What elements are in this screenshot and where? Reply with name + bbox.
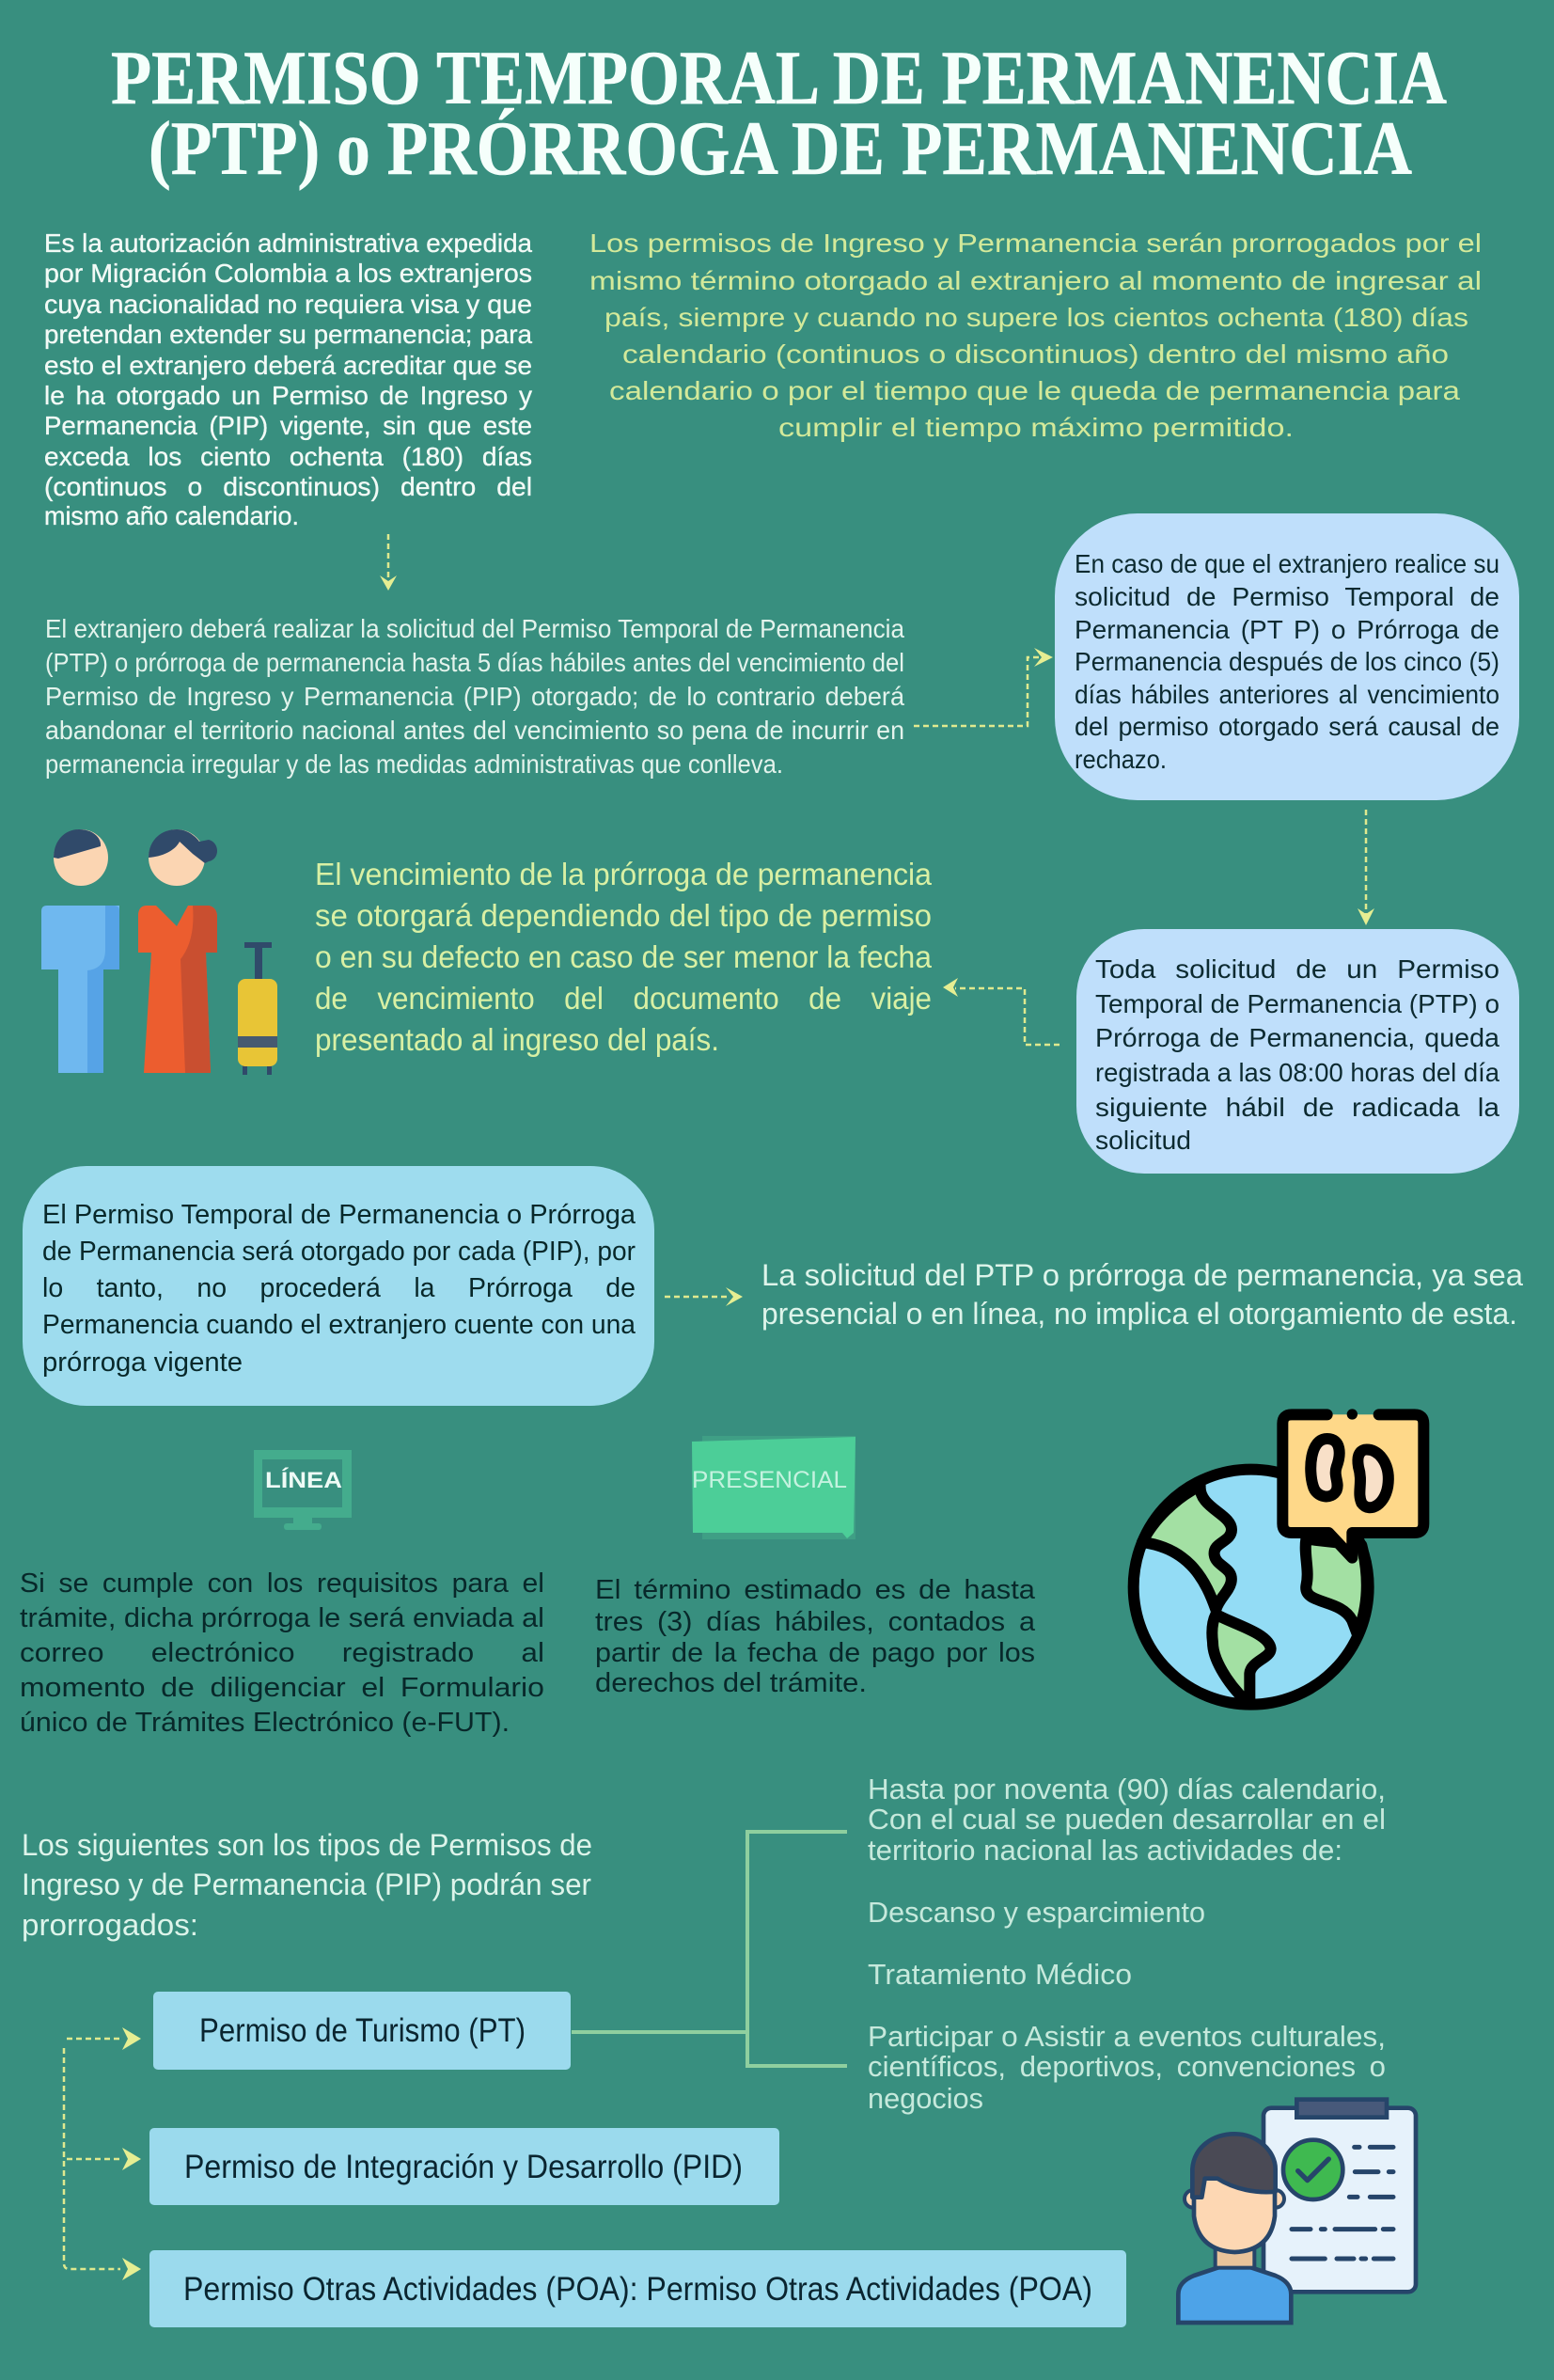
text block: tourism activities: Descanso y esparcimiento — [868, 1896, 1205, 1929]
text block: yellow intro: Los permisos de Ingreso y Permanencia serán prorrogados por el — [589, 229, 1482, 258]
arrow: to expiry text — [943, 978, 1060, 1045]
arrow: down from definition — [380, 534, 397, 591]
text block: expiry: se otorgará dependiendo del tipo de permiso — [315, 898, 932, 933]
panel: rejection bubble: En caso de que el extranjero realice su — [1075, 549, 1499, 578]
text block: definition: le ha otorgado un Permiso de Ingreso y — [44, 381, 532, 410]
panel: rejection bubble: Permanencia (PT P) o Prórroga de — [1075, 615, 1499, 644]
text block: definition: (continuos o discontinuos) dentro del — [44, 472, 532, 501]
panel: other activities permit: Permiso Otras Actividades (POA): Permiso Otras Actividades (POA) — [183, 2271, 1092, 2308]
panel: permit per PIP bubble: Permanencia cuando el extranjero cuente con una — [42, 1310, 636, 1340]
text block: tourism activities: Hasta por noventa (90) días calendario, — [868, 1773, 1386, 1805]
panel: permit per PIP bubble: de Permanencia será otorgado por cada (PIP), por — [42, 1237, 636, 1267]
arrow: bubble to bubble — [1358, 810, 1374, 925]
panel: registration bubble — [1076, 929, 1519, 1174]
text block: request note: La solicitud del PTP o prórroga de permanencia, ya sea — [761, 1258, 1523, 1292]
text block: yellow intro: calendario (continuos o discontinuos) dentro del mismo año — [622, 339, 1449, 369]
panel: registration bubble: Prórroga de Permanencia, queda — [1095, 1023, 1499, 1052]
panel: rejection bubble — [1055, 513, 1519, 800]
text block: permit types intro: Ingreso y de Permanencia (PIP) podrán ser — [22, 1868, 591, 1901]
text block: in-person result — [595, 1575, 1036, 1698]
text block: definition: mismo año calendario. — [44, 501, 299, 530]
text block: request note: presencial o en línea, no implica el otorgamiento de esta. — [761, 1297, 1517, 1331]
arrow: to request note — [665, 1287, 743, 1306]
text block: request deadline: abandonar el territorio nacional antes del vencimiento so pena de incurrir en — [45, 716, 904, 745]
text block: online result: correo electrónico registrado al — [20, 1638, 544, 1668]
icon: online monitor: LÍNEA — [265, 1467, 342, 1493]
icon: person with approved checklist — [1178, 2100, 1416, 2323]
connector: tourism branches — [572, 1832, 847, 2066]
panel: rejection bubble: Permanencia después de los cinco (5) — [1075, 647, 1499, 676]
icon: travellers with suitcase — [41, 829, 277, 1075]
text block: expiry: presentado al ingreso del país. — [315, 1022, 719, 1057]
text block: expiry: de vencimiento del documento de viaje — [315, 981, 932, 1016]
panel: rejection bubble: rechazo. — [1075, 745, 1167, 774]
panel: registration bubble: siguiente hábil de radicada la — [1095, 1093, 1499, 1122]
icon: globe with speech bubble — [1134, 1409, 1423, 1705]
text block: tourism activities: Participar o Asistir a eventos culturales, — [868, 2020, 1386, 2053]
panel: integration permit — [149, 2128, 779, 2205]
text block: expiry — [315, 857, 933, 1057]
text block: online result — [20, 1568, 544, 1738]
text block: request deadline: permanencia irregular y de las medidas administrativas que conlleva. — [45, 749, 783, 779]
text block: yellow intro: país, siempre y cuando no supere los cientos ochenta (180) días — [604, 303, 1468, 332]
text block: in-person result: El término estimado es de hasta — [595, 1575, 1036, 1605]
text block: definition — [44, 229, 532, 530]
panel: registration bubble: registrada a las 08:00 horas del día — [1095, 1058, 1499, 1087]
text block: in-person result: derechos del trámite. — [595, 1668, 867, 1698]
text block: permit types intro: prorrogados: — [22, 1908, 198, 1942]
text block: tourism activities — [868, 1773, 1386, 2115]
text block: yellow intro: calendario o por el tiempo que le queda de permanencia para — [609, 376, 1460, 405]
text block: definition: por Migración Colombia a los extranjeros — [44, 259, 532, 288]
text block: online result: Si se cumple con los requisitos para el — [20, 1568, 544, 1599]
panel: permit per PIP bubble: lo tanto, no procederá la Prórroga de — [42, 1273, 636, 1303]
text block: tourism activities: científicos, deportivos, convenciones o — [868, 2050, 1386, 2083]
text block: tourism activities: Tratamiento Médico — [868, 1958, 1132, 1991]
panel: other activities permit — [149, 2250, 1126, 2327]
panel: registration bubble: Temporal de Permanencia (PTP) o — [1095, 989, 1499, 1018]
text block: in-person result: partir de la fecha de pago por los — [595, 1638, 1035, 1668]
panel: rejection bubble: días hábiles anteriores al vencimiento — [1075, 680, 1499, 709]
text block: tourism activities: Con el cual se pueden desarrollar en el — [868, 1803, 1386, 1836]
text block: expiry: El vencimiento de la prórroga de permanencia — [315, 857, 933, 891]
text block: request deadline — [45, 614, 904, 779]
text block: tourism activities: territorio nacional las actividades de: — [868, 1834, 1342, 1867]
text block: online result: momento de diligenciar el Formulario — [20, 1673, 544, 1703]
text block: permit types intro — [22, 1828, 592, 1942]
text block: definition: pretendan extender su permanencia; para — [44, 320, 532, 349]
text block: request deadline: (PTP) o prórroga de permanencia hasta 5 días hábiles antes del vencimiento del — [45, 648, 904, 677]
panel: registration bubble: solicitud — [1095, 1126, 1191, 1155]
panel: tourism permit: Permiso de Turismo (PT) — [199, 2012, 526, 2049]
text block: definition: cuya nacionalidad no requiera visa y que — [44, 290, 532, 319]
panel: integration permit: Permiso de Integración y Desarrollo (PID) — [184, 2149, 743, 2185]
panel: rejection bubble: solicitud de Permiso Temporal de — [1075, 582, 1499, 611]
text block: expiry: o en su defecto en caso de ser menor la fecha — [315, 939, 933, 974]
text block: definition: esto el extranjero deberá acreditar que se — [44, 351, 532, 380]
text block: permit types intro: Los siguientes son los tipos de Permisos de — [22, 1828, 592, 1862]
panel: rejection bubble: del permiso otorgado será causal de — [1075, 712, 1499, 741]
title — [111, 35, 1447, 191]
panel: registration bubble: Toda solicitud de un Permiso — [1095, 954, 1499, 984]
text block: in-person result: tres (3) días hábiles, contados a — [595, 1607, 1036, 1637]
panel: tourism permit — [153, 1992, 571, 2070]
arrows: permit list — [64, 2027, 141, 2280]
icon: in-person label: PRESENCIAL — [692, 1467, 847, 1493]
text block: request deadline: El extranjero deberá realizar la solicitud del Permiso Temporal de Permanencia — [45, 614, 904, 643]
text block: request note — [761, 1258, 1523, 1331]
text block: definition: Permanencia (PIP) vigente, sin que este — [44, 411, 532, 440]
text block: tourism activities: negocios — [868, 2082, 983, 2115]
panel: permit per PIP bubble: prórroga vigente — [42, 1348, 243, 1378]
text block: yellow intro — [589, 229, 1482, 442]
panel: permit per PIP bubble: El Permiso Temporal de Permanencia o Prórroga — [42, 1200, 636, 1230]
text block: request deadline: Permiso de Ingreso y Permanencia (PIP) otorgado; de lo contrario deberá — [45, 682, 904, 711]
text block: online result: único de Trámites Electrónico (e-FUT). — [20, 1708, 510, 1738]
text block: online result: trámite, dicha prórroga le será enviada al — [20, 1603, 544, 1633]
text block: yellow intro: cumplir el tiempo máximo permitido. — [778, 413, 1294, 442]
icon: in-person label — [692, 1436, 855, 1539]
text block: definition: exceda los ciento ochenta (180) días — [44, 442, 532, 471]
icon: online monitor — [254, 1450, 352, 1530]
arrow: to bubble rejection — [914, 648, 1053, 726]
text block: definition: Es la autorización administrativa expedida — [44, 229, 532, 258]
panel: permit per PIP bubble — [23, 1166, 654, 1406]
text block: yellow intro: mismo término otorgado al extranjero al momento de ingresar al — [589, 266, 1482, 295]
